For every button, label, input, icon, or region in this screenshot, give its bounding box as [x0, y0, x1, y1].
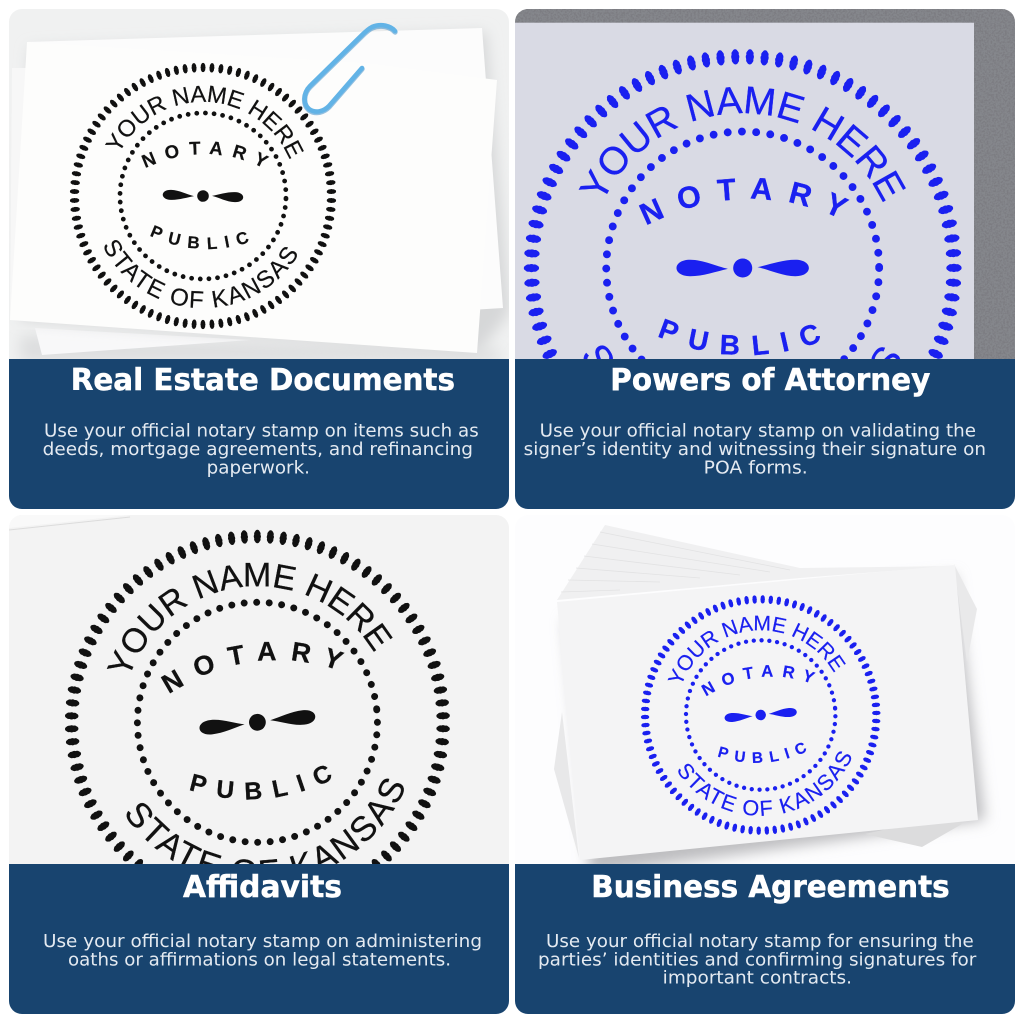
description: Use your official notary stamp on administering: [43, 932, 482, 952]
panel: business agreements: [515, 525, 1015, 1014]
panel: real estate documents: [9, 9, 509, 509]
heading: Affidavits: [183, 870, 342, 905]
description: [43, 932, 482, 970]
photo: stamped sheet on concrete: [515, 9, 1015, 359]
description: [43, 422, 479, 478]
stamp: black, enlarged and cropped: STATE OF KANSAS: [126, 778, 404, 864]
panel: affidavits: [9, 515, 509, 1014]
stamp: blue, enlarged and cropped: YOUR NAME HERE: [578, 86, 906, 202]
description: deeds, mortgage agreements, and refinancing: [43, 440, 473, 460]
stamp: black, Kansas notary: STATE OF KANSAS: [104, 240, 297, 308]
stamp: blue on card: NOTARY: [701, 665, 816, 696]
heading: Powers of Attorney: [610, 363, 931, 398]
stamp: blue, enlarged and cropped: PUBLIC: [658, 318, 820, 356]
description: Use your official notary stamp on items such as: [44, 422, 479, 442]
stamp: black, enlarged and cropped: PUBLIC: [190, 766, 332, 800]
stamp: black, Kansas notary: NOTARY: [141, 142, 270, 168]
stamp: black, Kansas notary: PUBLIC: [150, 225, 248, 250]
stamp: black, Kansas notary: YOUR NAME HERE: [105, 86, 304, 159]
icon: blue paperclip: [305, 25, 395, 113]
stamp: black, enlarged and cropped: YOUR NAME HERE: [106, 562, 393, 670]
stamp: black, enlarged and cropped: [65, 530, 450, 864]
panel: powers of attorney: [515, 9, 1015, 509]
stamp: blue, enlarged and cropped: NOTARY: [638, 178, 850, 225]
description: POA forms.: [704, 458, 808, 478]
description: [538, 932, 977, 989]
description: Use your official notary stamp on validating the: [540, 422, 976, 442]
photo: stamped paper close-up: [9, 515, 509, 864]
description: parties’ identities and confirming signatures for: [538, 950, 977, 970]
photo: stack of stamped cards: [554, 525, 992, 864]
stamp: blue on card: PUBLIC: [718, 742, 806, 763]
stamp: blue on card: STATE OF KANSAS: [678, 751, 852, 816]
stamp: blue on card: [640, 595, 880, 835]
heading: Business Agreements: [591, 870, 950, 905]
description: signer’s identity and witnessing their signature on: [524, 440, 986, 460]
description: [524, 423, 984, 474]
description: important contracts.: [663, 969, 852, 989]
stamp: blue on card: YOUR NAME HERE: [668, 616, 846, 682]
heading: Real Estate Documents: [71, 363, 455, 398]
description: Use your official notary stamp for ensuring the: [546, 932, 974, 952]
stamp: blue, enlarged and cropped: STATE OF KANSAS: [584, 345, 900, 359]
description: paperwork.: [207, 458, 310, 478]
stamp: black, Kansas notary: [70, 62, 336, 330]
stamp: blue, enlarged and cropped: [524, 49, 962, 359]
description: oaths or affirmations on legal statements.: [68, 950, 451, 970]
photo: stamped papers with paperclip: [9, 9, 509, 359]
stamp: black, enlarged and cropped: NOTARY: [160, 642, 344, 694]
